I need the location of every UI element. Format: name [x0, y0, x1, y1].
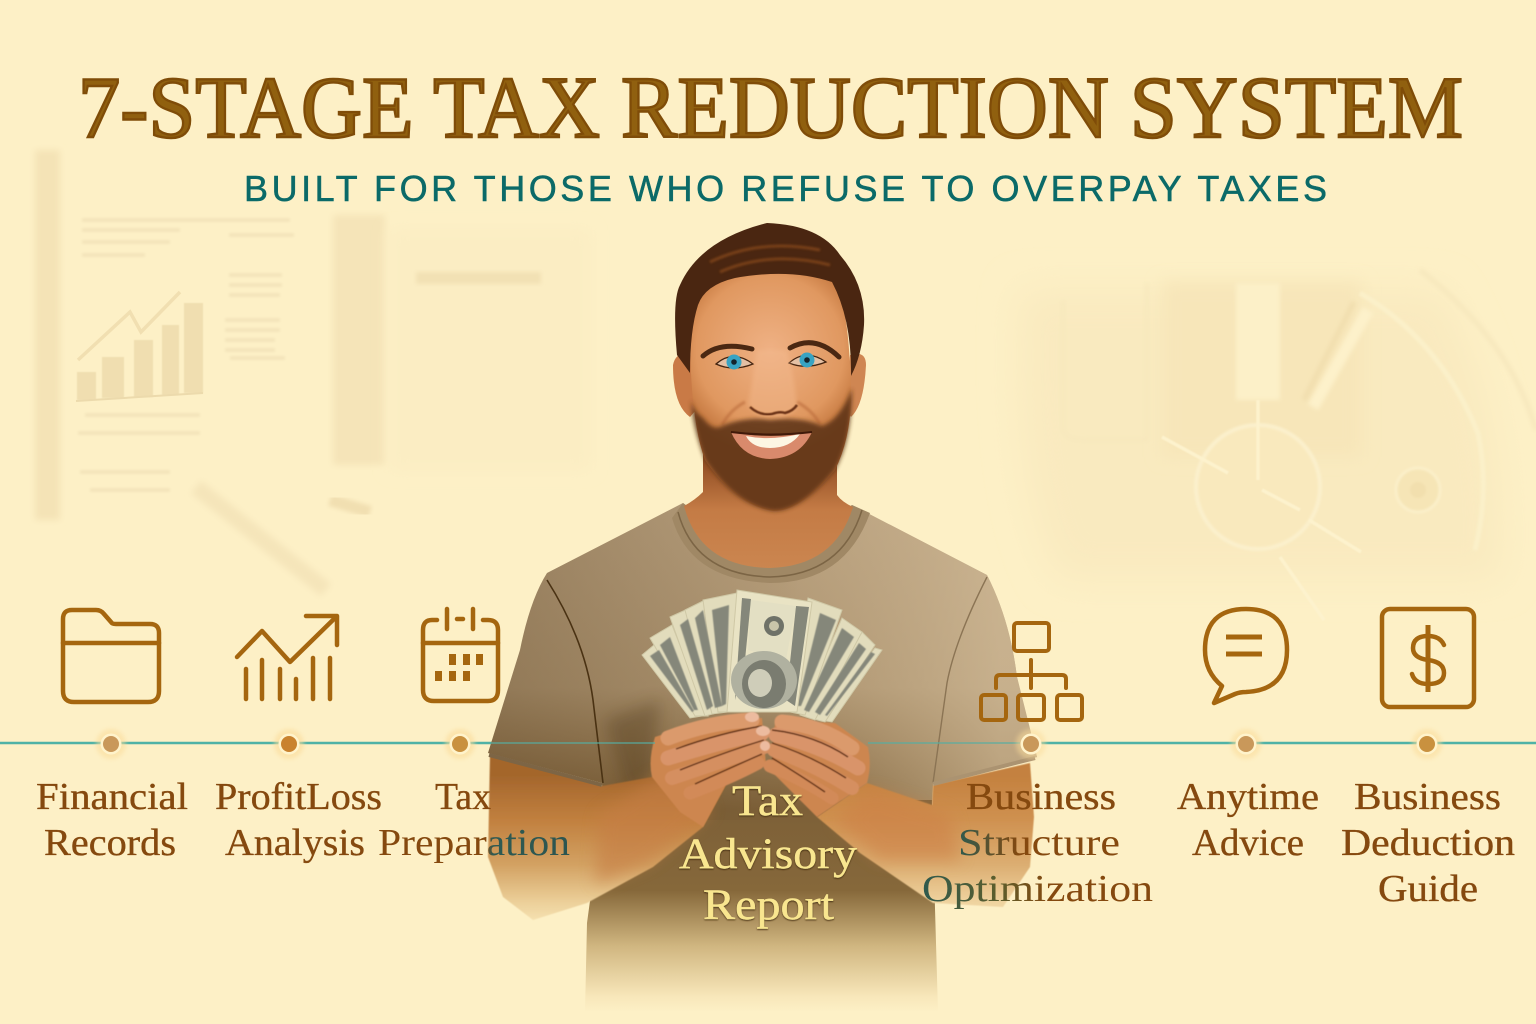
icon: dollar box — [1382, 609, 1474, 707]
eye left — [716, 354, 753, 370]
left hand — [651, 718, 766, 827]
neck — [684, 450, 853, 568]
label: Business — [966, 776, 1116, 818]
label: Deduction — [1341, 822, 1515, 864]
collar — [672, 503, 870, 583]
label: Advice — [1192, 822, 1304, 864]
man holding cash — [480, 223, 1050, 1012]
icon: speech bubble — [1205, 609, 1287, 703]
label: Business — [1354, 776, 1501, 818]
timeline dot — [274, 729, 304, 759]
arm right — [817, 763, 1034, 907]
step 4: tax advisory report: Tax — [732, 778, 803, 825]
label: Structure — [958, 822, 1120, 864]
step 4: tax advisory report: Report — [703, 882, 834, 929]
label: Tax — [435, 776, 491, 818]
nose — [748, 350, 797, 417]
label: Guide — [1378, 868, 1478, 910]
timeline dot — [445, 729, 475, 759]
label: Preparation — [378, 822, 570, 864]
left sleeve hem — [489, 755, 602, 785]
background: faint bank vault door — [1018, 270, 1536, 620]
collar rib — [678, 510, 862, 577]
title: 7-STAGE TAX REDUCTION SYSTEM — [78, 60, 1463, 157]
fingernails — [745, 712, 770, 751]
fan of dollar bills — [642, 590, 882, 722]
icon: calendar — [423, 609, 498, 701]
icon: org chart — [981, 623, 1082, 720]
icon: folder — [63, 610, 159, 702]
hands — [651, 712, 870, 827]
center bill — [727, 590, 812, 712]
cheek smile shading — [722, 402, 820, 425]
arm left — [488, 755, 727, 920]
right ear — [846, 354, 866, 417]
label: Optimization — [922, 868, 1153, 910]
label: Analysis — [225, 822, 365, 864]
label: Financial — [36, 776, 188, 818]
face — [690, 268, 851, 511]
mouth — [731, 432, 812, 459]
step 3: tax preparation — [378, 609, 570, 864]
label: Records — [44, 822, 176, 864]
step 5: business structure optimization — [922, 623, 1153, 910]
eyebrows — [703, 346, 752, 356]
subtitle: BUILT FOR THOSE WHO REFUSE TO OVERPAY TAXES — [244, 168, 1327, 209]
timeline line — [0, 742, 1536, 744]
shirt shading — [488, 504, 1037, 800]
timeline dot — [1412, 729, 1442, 759]
timeline dot — [1016, 729, 1046, 759]
eye right — [789, 352, 826, 368]
step 4: tax advisory report: Advisory — [679, 831, 858, 878]
beard — [691, 388, 852, 511]
timeline dot — [96, 729, 126, 759]
step 4: tax advisory report — [679, 778, 858, 929]
left ear — [673, 354, 696, 417]
label: ProfitLoss — [215, 776, 382, 818]
timeline dot — [1231, 729, 1261, 759]
background: faint financial document with chart — [35, 150, 590, 590]
step 1: financial records — [36, 610, 188, 864]
label: Anytime — [1177, 776, 1319, 818]
hair — [675, 223, 864, 376]
right hand — [772, 720, 870, 817]
step 7: business deduction guide — [1341, 609, 1515, 910]
wrist tone left — [595, 775, 712, 885]
icon: growth chart — [237, 616, 337, 699]
shirt — [488, 503, 1037, 1012]
right sleeve hem — [933, 758, 1035, 784]
step 6: anytime advice — [1177, 609, 1319, 864]
faint timeline over shirt — [488, 742, 1020, 744]
calendar dates — [435, 654, 483, 681]
wrist tone right — [835, 790, 960, 860]
step 2: profit loss analysis — [215, 616, 382, 864]
